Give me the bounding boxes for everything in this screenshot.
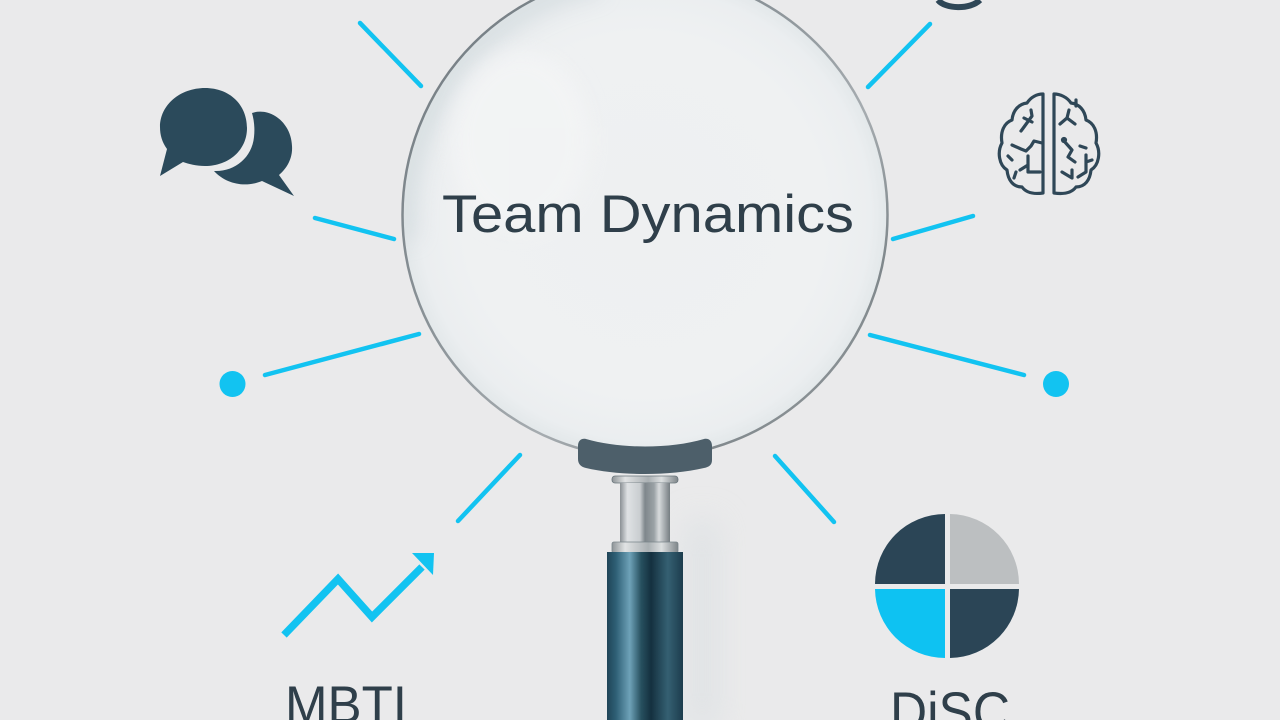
ferrule bracket	[578, 439, 712, 474]
accent rays around the lens	[265, 23, 1024, 522]
metal neck	[612, 476, 678, 553]
lens	[402, 0, 888, 458]
lens title: Team Dynamics	[442, 185, 854, 244]
magnifying glass	[402, 0, 888, 720]
dot: right accent	[1043, 371, 1069, 397]
handle shadow	[685, 520, 719, 720]
icon: partially cropped circle top right	[938, 0, 980, 7]
chart: DiSC pie	[875, 514, 1019, 658]
handle	[607, 552, 683, 720]
icon: rising trend arrow	[284, 553, 434, 635]
icon: brain	[999, 94, 1099, 193]
icon: speech bubbles	[160, 88, 294, 196]
dot: left accent	[220, 371, 246, 397]
